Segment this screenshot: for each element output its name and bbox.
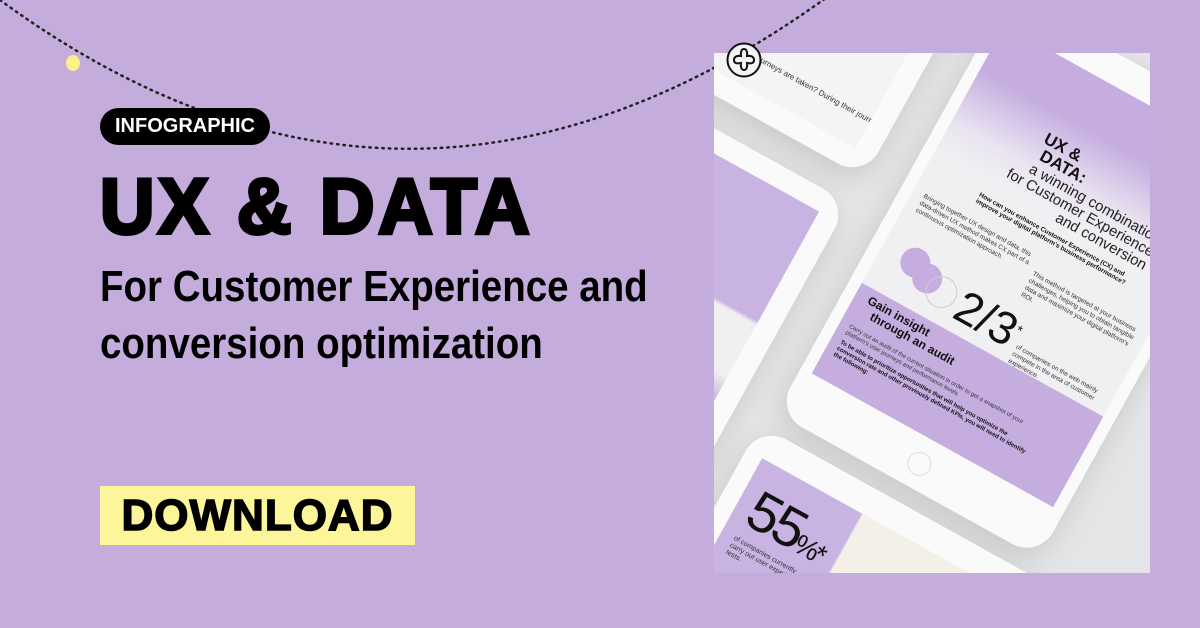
tablet main: improve your digital platform's business performance? xyxy=(974,198,1127,286)
tablet bottom xyxy=(566,425,1162,628)
tablet main: continuous optimization approach. xyxy=(914,207,1004,261)
tablet main: the following: xyxy=(832,352,869,376)
tablet left middle xyxy=(247,9,849,628)
tag: infographic: INFOGRAPHIC xyxy=(115,115,255,137)
yellow dot xyxy=(66,55,80,71)
tablet main: experience. xyxy=(1007,358,1040,380)
tablet main: Carry out an audit of the current situation in order to get a snapshot of your xyxy=(848,324,1024,425)
home button xyxy=(903,448,936,480)
download button: DOWNLOAD xyxy=(122,491,393,540)
tablet main: of companies on the web mainly xyxy=(1015,344,1099,395)
subtitle: For Customer Experience and xyxy=(100,262,648,311)
stat 2/3: 2/3* xyxy=(946,280,1027,356)
main tablet title: DATA: xyxy=(1037,146,1090,187)
photo: tablets mockup xyxy=(714,53,1150,573)
tablet main: Bringing together UX design and data, this xyxy=(922,193,1032,258)
tablet main: conversion rate and other previously defined KPIs, you will need to identify xyxy=(835,346,1026,455)
tablet bottom: 55%* xyxy=(737,478,830,570)
tablet main: This method is targeted at your business xyxy=(1031,270,1137,333)
tablet main: data and maximize your digital platform's xyxy=(1023,284,1130,348)
tablet bottom: tests. xyxy=(724,549,743,563)
tablet main: challenges, helping you to obtain tangible xyxy=(1027,277,1135,341)
tablet main: and conversion xyxy=(1052,209,1150,274)
tablet main: data-driven UX method makes CX part of a xyxy=(918,200,1030,266)
tablet main: ROI. xyxy=(1019,291,1035,304)
title: UX & DATA xyxy=(100,162,533,250)
subtitle: conversion optimization xyxy=(100,319,543,368)
tablet main: To be able to prioritize opportunities that will help you optimize the xyxy=(839,340,1008,437)
tablet main: compete in the area of customer xyxy=(1011,351,1096,402)
audit section: Gain insight xyxy=(865,294,933,339)
tablet top-left xyxy=(514,0,1058,178)
main tablet title: UX & xyxy=(1041,129,1085,166)
subtitle xyxy=(100,262,648,368)
tablet main: How can you enhance Customer Experience (CX) and xyxy=(978,192,1126,278)
icon: plus circle xyxy=(726,42,762,78)
circles xyxy=(895,242,936,283)
tablet main: platform's user journeys and performance levels. xyxy=(844,330,960,398)
tag: infographic xyxy=(100,108,270,145)
audit section: through an audit xyxy=(868,310,957,368)
tablet main xyxy=(776,0,1200,558)
